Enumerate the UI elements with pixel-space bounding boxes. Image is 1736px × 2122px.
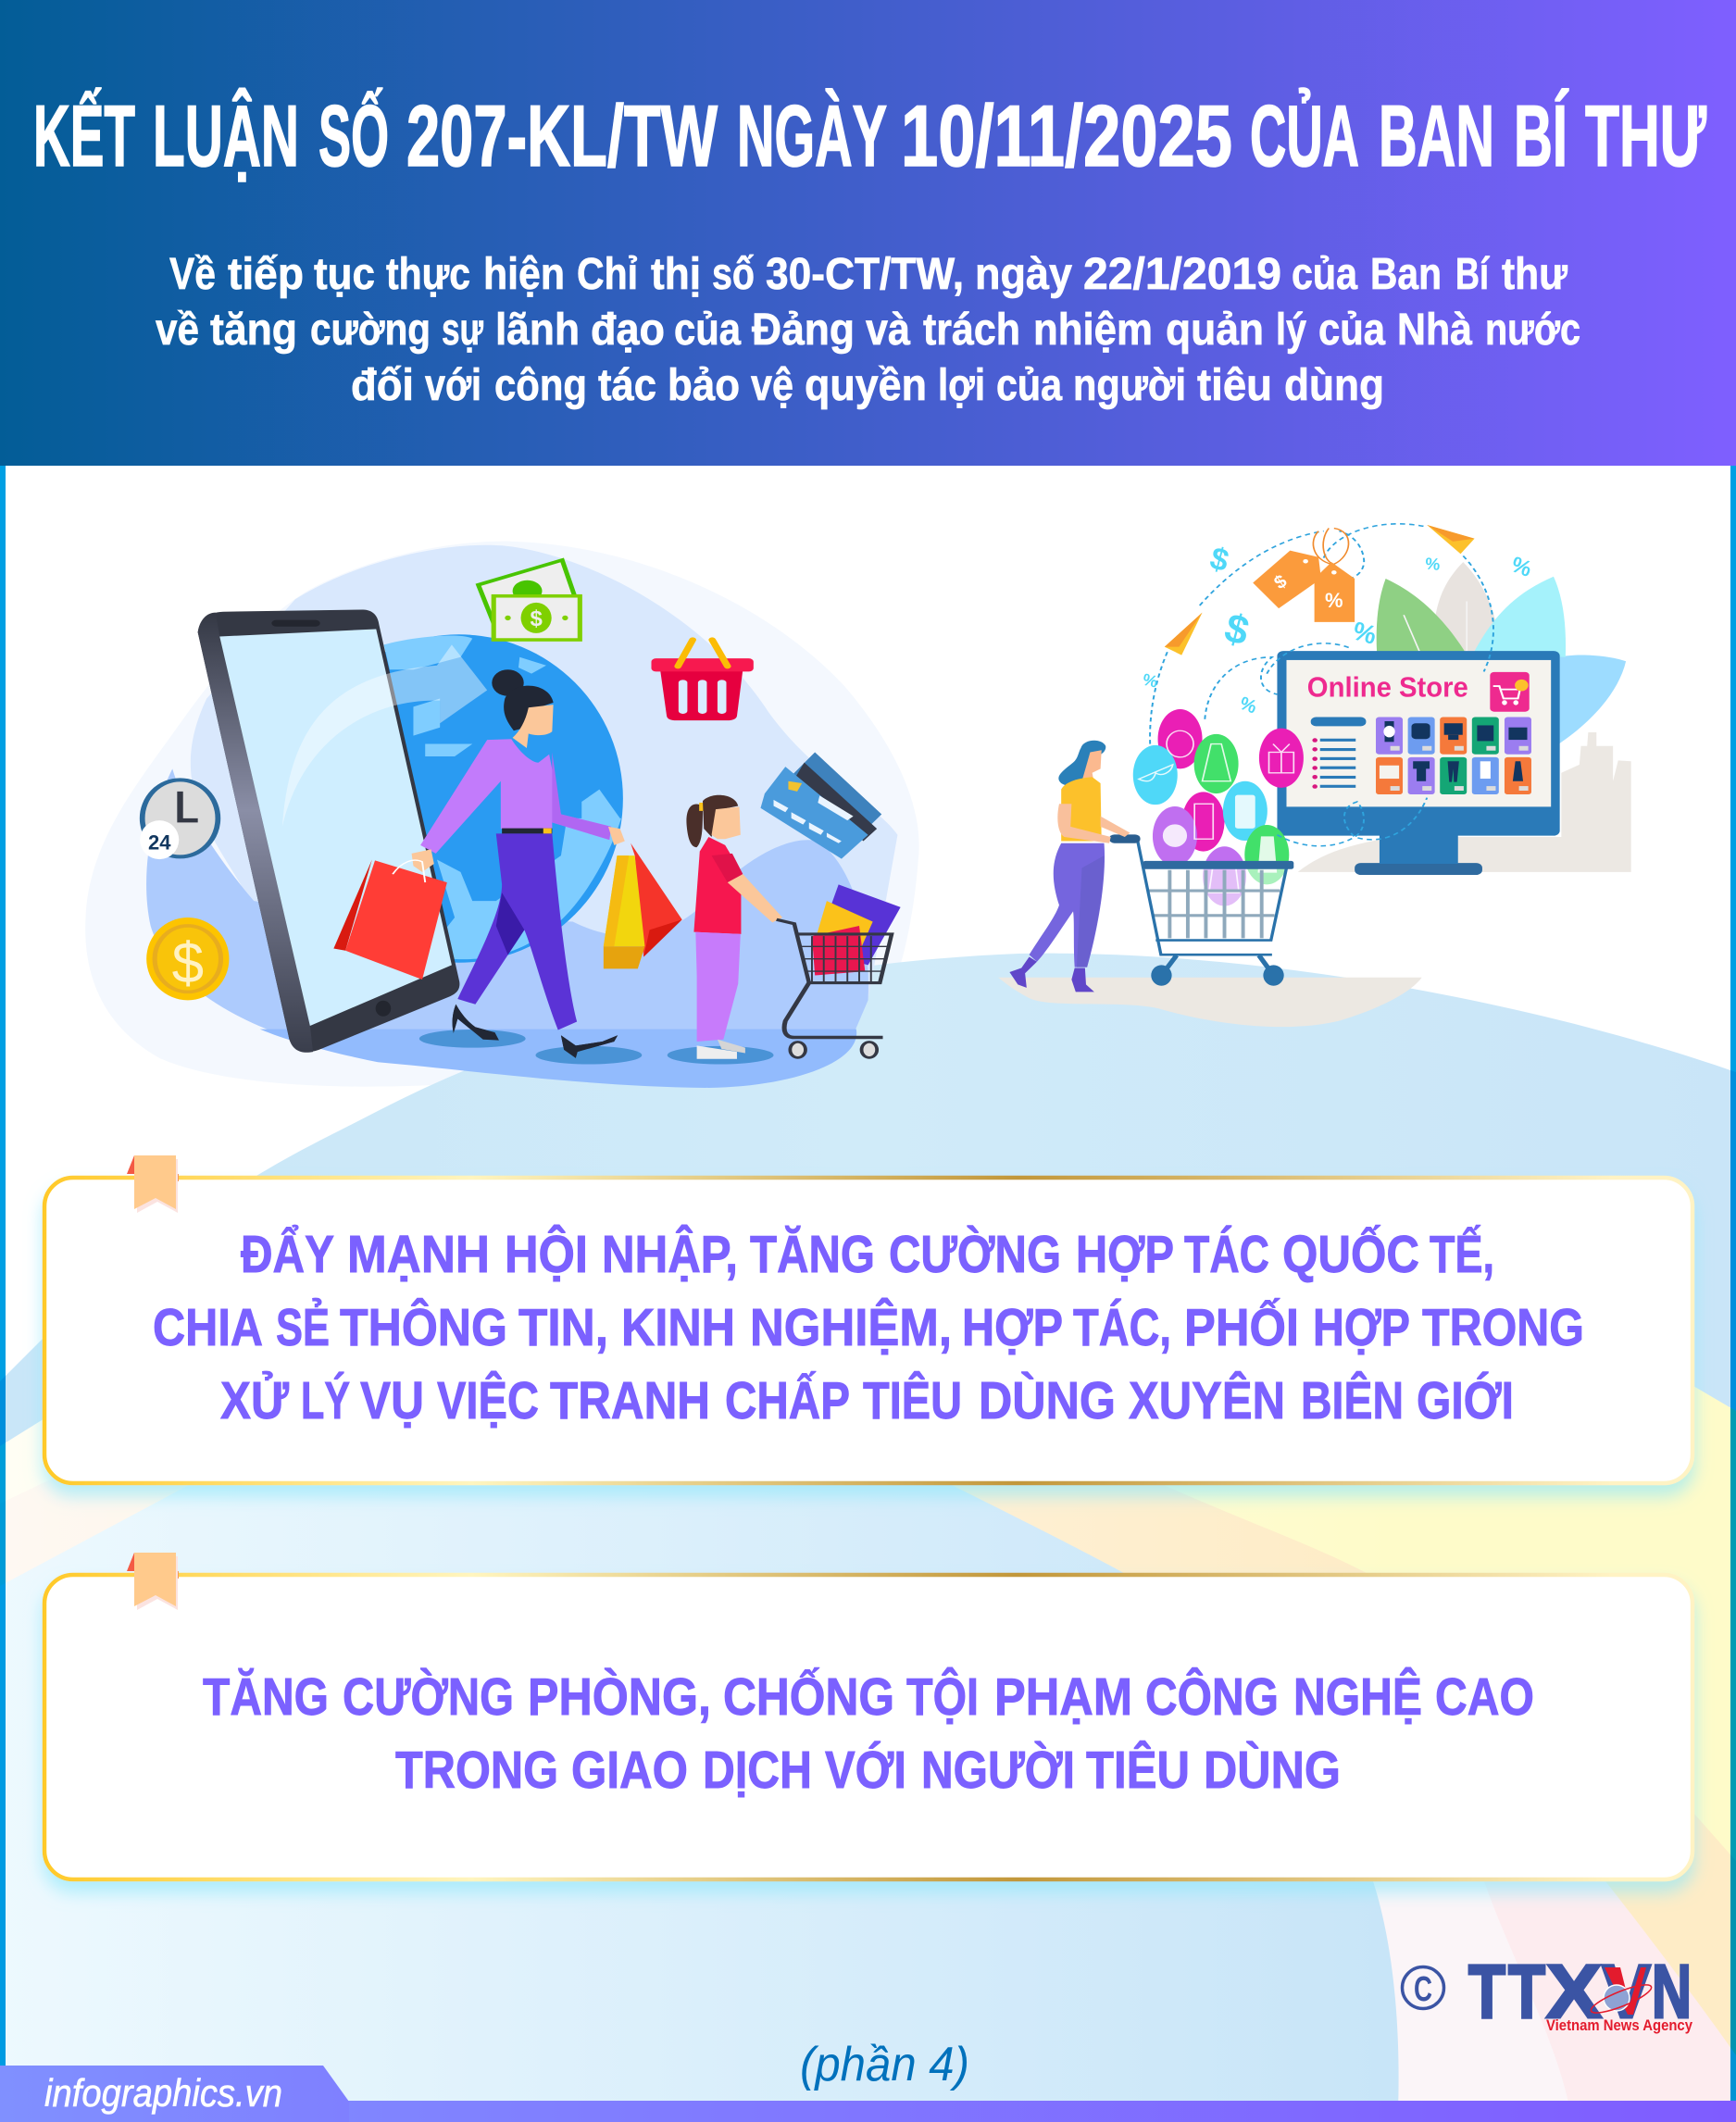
clock icon: 24 [148,830,171,854]
online store label: Online Store [1307,671,1468,704]
subtitle: tăng [210,306,297,355]
product tiles [1376,718,1531,794]
subtitle: hiện [483,250,565,299]
card 2 text: CHỐNG [723,1666,894,1727]
subtitle: quản [1166,306,1264,355]
subtitle: lợi [938,361,985,410]
woman with trolley [1009,741,1130,992]
mid blue blob [191,545,897,1000]
title: BÍ [1514,87,1569,184]
shopping cart [777,884,901,1057]
subtitle: công [494,361,587,410]
card 1 text: TIÊU [863,1370,962,1430]
phone [198,609,459,1053]
card 1 text: TRONG [1422,1298,1584,1357]
logo: TTXVN [1468,1950,1692,2034]
card 2 text: TĂNG [203,1667,329,1727]
card 1 text: GIỚI [1417,1371,1514,1430]
card 1 text: TRANH [550,1371,710,1430]
card 2 text: PHÒNG, [528,1667,711,1727]
logo: TTXVN: N [1652,1950,1692,2034]
frame left border [0,466,6,2066]
card 1 text: QUỐC [1282,1224,1419,1284]
shopping basket [651,640,754,720]
card 1 text: HỘI [505,1224,588,1284]
card 1 text [153,1224,1584,1430]
subtitle: Về [169,250,216,299]
subtitle: của [674,306,741,355]
subtitle: của [996,361,1062,410]
title: NGÀY [737,87,887,184]
ground band [260,1030,856,1088]
logo: TTXVN: T [1508,1950,1545,2034]
woman [412,669,625,1058]
card 1 text: MẠNH [347,1225,490,1284]
part label: (phần 4) [800,2038,969,2091]
subtitle: tác [598,361,656,410]
card 1 text: VIỆC [437,1370,539,1430]
subtitle: nước [1485,306,1580,355]
card 1 text: DÙNG [979,1371,1116,1430]
subtitle: sự [442,306,483,355]
card 2 text: TIÊU [1086,1740,1190,1800]
card 1 text: TĂNG [750,1225,875,1284]
card 1 text: TÁC [1184,1225,1269,1284]
pale outer blob behind phone scene [85,542,919,1088]
card 1 text: NGHIỆM, [750,1297,952,1357]
card 2 text: CÔNG [1145,1666,1279,1727]
subtitle: Đảng [752,306,855,355]
footer tab [0,2066,349,2122]
floating dollar and percent signs [1141,541,1535,718]
card 1 text: SẺ [276,1297,330,1357]
subtitle: thư [1502,250,1567,299]
darker blue blob [146,768,868,1050]
card 2 text [203,1666,1534,1800]
title: LUẬN [153,87,299,184]
floating dollar and percent signs: % [1141,670,1159,692]
card 2 text: CAO [1435,1667,1534,1727]
card 1 text: BIÊN [1301,1370,1404,1430]
card 1 text: CHIA [153,1298,263,1357]
subtitle: thực [386,250,470,299]
card 2 text: CƯỜNG [343,1667,514,1727]
frame right border [1730,466,1736,2101]
logo: TTXVN: V [1602,1950,1651,2034]
paper plane right [1427,525,1475,554]
logo: TTXVN: Vietnam News Agency [1546,2016,1692,2034]
card 1 text: ĐẨY [241,1224,334,1284]
clock icon [140,780,218,859]
logo: TTXVN: X [1546,1950,1602,2034]
floating dollar and percent signs: % [1508,552,1535,582]
subtitle: đạo [591,306,665,355]
site label: infographics.vn [44,2071,282,2115]
header band [0,0,1736,466]
money [479,560,580,640]
card 1 text: PHỐI [1184,1297,1299,1357]
coin icon [146,917,229,1000]
subtitle: lãnh [495,306,580,355]
shopping trolley [1109,834,1293,986]
subtitle: số [712,250,755,299]
card 2 text: VỚI [825,1741,906,1800]
red and yellow bags [604,843,682,968]
card 1 text: XỬ [220,1370,290,1430]
subtitle: Chỉ [577,250,638,299]
title: KẾT [33,87,135,184]
background: pale pink wave [1296,1666,1570,2111]
subtitle: và [866,306,910,355]
card 1 text: HỢP [962,1298,1063,1357]
card 1 text: TÁC, [1073,1298,1171,1357]
subtitle: tục [314,250,375,299]
title: 207-KL/TW [406,87,718,184]
copyright symbol: C [1414,1970,1432,2009]
card 2 text: TRONG [395,1741,558,1800]
leaves [1377,562,1626,752]
subtitle: lý [1276,306,1306,355]
floating dollar and percent signs: % [1350,616,1380,650]
card 1 text: VỤ [360,1371,424,1430]
card 1 text: XUYÊN [1129,1370,1285,1430]
card 2 text: NGHỆ [1293,1666,1422,1727]
subtitle: đối [351,361,414,410]
title: CỦA [1250,87,1359,184]
card 2 text: DÙNG [1204,1741,1341,1800]
subtitle: 22/1/2019 [1083,250,1281,299]
dashed flight paths [1150,524,1493,846]
card 1 text: NHẬP, [602,1224,738,1284]
subtitle: tiếp [228,250,304,299]
card 1 text: HỢP [1313,1298,1410,1357]
card 2 text: DỊCH [703,1741,812,1800]
title [33,87,1706,184]
floating dollar and percent signs: % [1425,555,1441,574]
copyright symbol [1402,1966,1444,2009]
paper plane left [1165,613,1203,655]
ground shadows [419,1030,774,1065]
ground blob [998,978,1422,1027]
card 1 text: CƯỜNG [889,1225,1061,1284]
subtitle [156,250,1580,410]
card 1 text: CHẤP [725,1370,850,1430]
subtitle: Nhà [1397,306,1472,355]
card 2 text: GIAO [571,1741,688,1800]
subtitle: cường [310,306,431,355]
subtitle: của [1292,250,1357,299]
subtitle: nhiệm [1033,306,1153,355]
price tags: % [1325,589,1343,612]
subtitle: Ban [1370,250,1442,299]
card 2 text: TỘI [906,1666,979,1727]
subtitle: bảo [668,361,740,410]
floating dollar and percent signs: $ [1220,605,1254,655]
cart app icon [1490,672,1530,712]
card 1 text: TIN, [518,1298,608,1357]
globe [294,634,623,963]
footer bar [0,2066,1736,2122]
subtitle: với [425,361,481,410]
arrow out of phone [282,644,487,827]
background: pink wave [1296,1666,1736,2111]
background: blue hill [0,954,1736,2122]
floating dollar and percent signs: % [1237,693,1259,718]
card 1 text: HỢP [1076,1225,1174,1284]
background: light blue wave [0,1360,1399,2111]
subtitle: tiêu [1197,361,1272,410]
subtitle: thị [651,250,701,299]
subtitle: trách [923,306,1020,355]
floating dollar and percent signs: $ [1206,541,1232,579]
red shopping bag [333,860,447,980]
card 1 text: LÝ [301,1370,350,1430]
card 2 text: PHẠM [994,1667,1132,1727]
subtitle: Bí [1455,250,1490,299]
background: yellow wave [0,1193,1736,2122]
bookmark ribbon 1 [127,1155,179,1213]
coin icon: $ [172,932,204,996]
subtitle: quyền [805,361,927,410]
logo: TTXVN: T [1468,1950,1505,2034]
card 1 text: THÔNG [340,1297,507,1357]
subtitle: vệ [751,361,793,410]
subtitle: dùng [1284,361,1384,410]
title: 10/11/2025 [901,87,1232,184]
subtitle: của [1318,306,1385,355]
illustration: online store scene [998,524,1631,1027]
credit cards [760,752,881,859]
price tags: $ [1270,571,1291,593]
subtitle: về [156,306,199,355]
price tags [1253,529,1355,622]
card 2 text: NGƯỜI [921,1741,1075,1800]
city skyline [1298,732,1631,872]
panel: card 1 [44,1155,1692,1483]
girl [686,795,782,1059]
monitor [1277,651,1560,875]
subtitle: ngày [975,250,1072,299]
card 1 text: KINH [621,1298,735,1357]
floating product pills [1133,709,1304,906]
subtitle: người [1073,361,1186,410]
woman's shoes [453,1005,618,1058]
card 1 text: TẾ, [1430,1224,1494,1284]
title: SỐ [318,87,389,184]
illustration: phone shopping scene [140,545,901,1088]
background: peach wave [0,1342,1736,2122]
title: BAN [1379,87,1494,184]
bookmark ribbon 2 [127,1553,179,1610]
subtitle: 30-CT/TW, [766,250,964,299]
money: $ [530,606,543,631]
sidebar list [1311,718,1366,789]
panel: card 2 [44,1553,1692,1879]
